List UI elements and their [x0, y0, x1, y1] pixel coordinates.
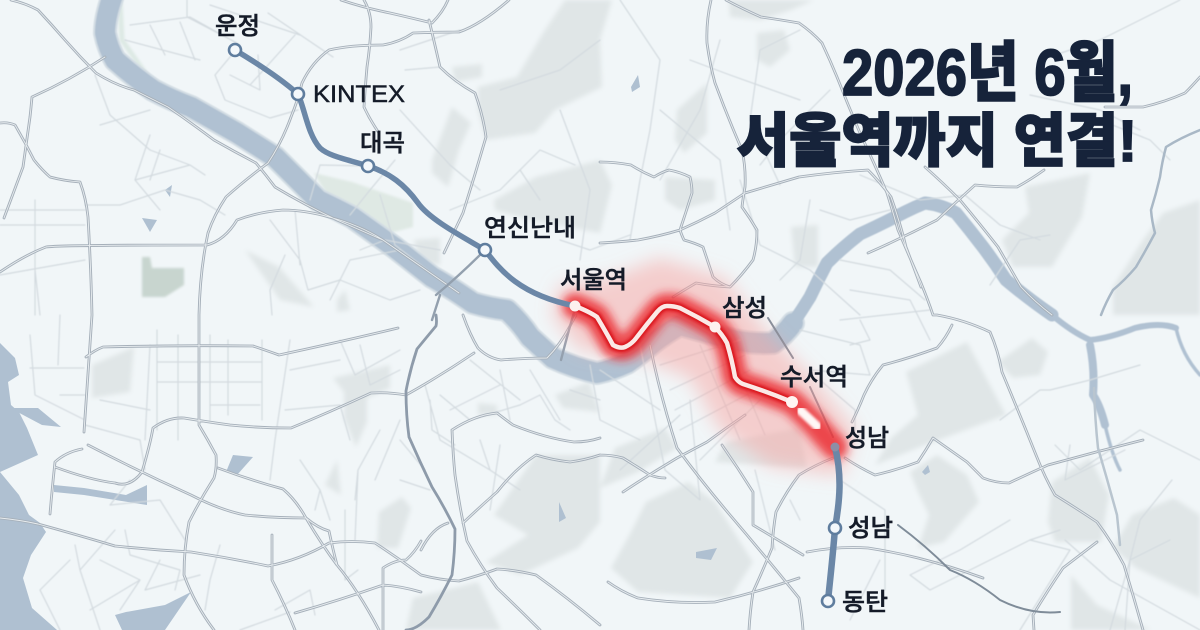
station labels: 삼성 — [722, 295, 767, 322]
metro route line: blue sections — [235, 50, 840, 601]
Han river and water bodies — [105, 0, 1200, 470]
station markers — [229, 44, 841, 607]
title: 서울역까지 연결! — [737, 109, 1137, 174]
station labels — [215, 13, 893, 616]
train light streak — [801, 411, 817, 426]
metro route line: highlighted section — [575, 306, 792, 402]
station labels: 동탄 — [842, 589, 888, 616]
station labels: 대곡 — [360, 130, 405, 157]
title — [737, 36, 1137, 174]
station labels: 성남 — [848, 515, 893, 542]
station labels: 서울역 — [560, 267, 627, 294]
station labels: 성남 — [845, 425, 889, 452]
title: 2026년 6월, — [842, 36, 1133, 109]
station labels: 수서역 — [780, 364, 848, 391]
station labels: KINTEX — [313, 81, 405, 108]
station labels: 운정 — [215, 13, 260, 40]
lakes, harbours and sea — [0, 75, 930, 630]
green riverside parks — [120, 2, 413, 297]
red glow: Seoul Station to Seongnam section — [552, 258, 856, 476]
station labels: 연신난내 — [484, 215, 576, 242]
